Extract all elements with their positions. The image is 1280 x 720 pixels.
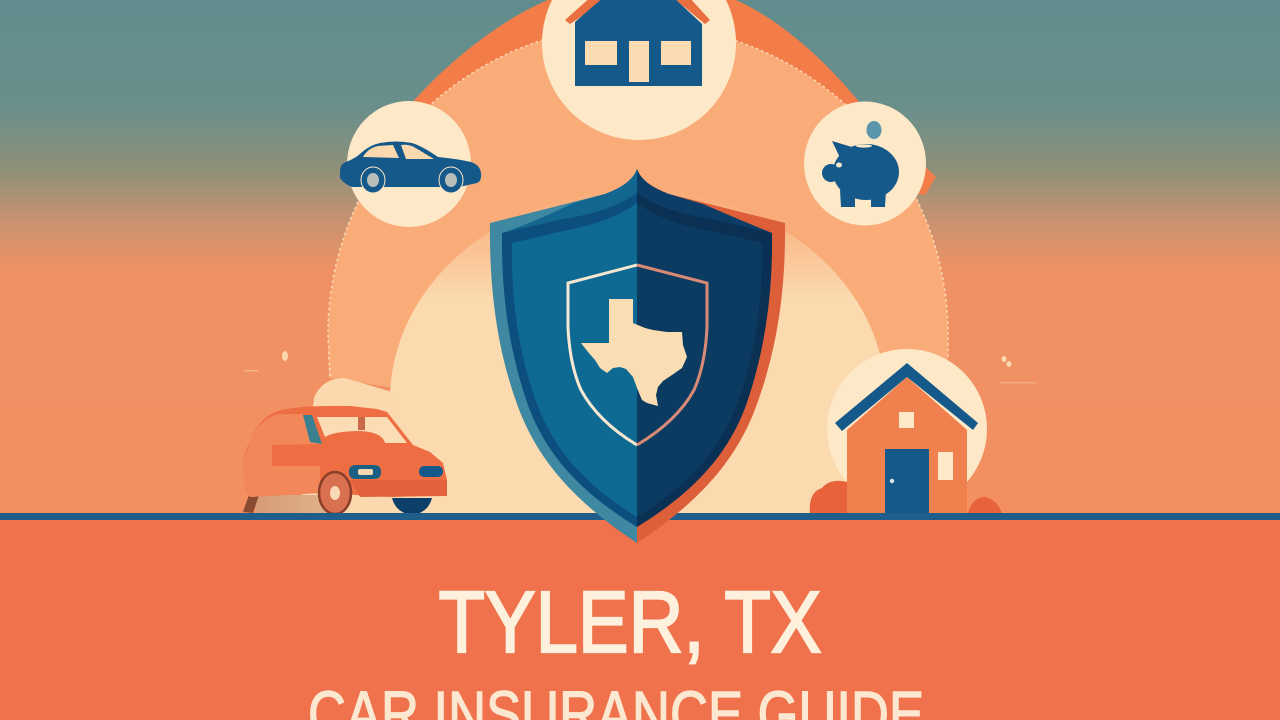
icon: house in cream circle, right <box>810 349 1002 515</box>
cream mound behind car <box>300 378 420 516</box>
ground line <box>0 513 1280 520</box>
icon: car in circle, left <box>340 101 481 227</box>
icon: house in circle, top <box>542 0 736 140</box>
small sparkle marks, right <box>1000 356 1036 384</box>
icon: piggy bank in circle, right <box>804 102 926 226</box>
icon: Texas silhouette <box>581 299 687 406</box>
dashed arc outline <box>328 25 948 376</box>
lower orange panel <box>0 520 1280 720</box>
inner cream dome <box>390 190 886 516</box>
inner shield outline, right <box>637 265 707 445</box>
background sky gradient <box>0 0 1280 516</box>
peach semicircle <box>328 25 948 420</box>
inner shield outline, left <box>568 265 637 445</box>
icon: red car <box>243 406 447 515</box>
outer orange arc <box>400 0 936 195</box>
small sparkle marks, left <box>244 351 288 372</box>
icon: shield with Texas <box>490 169 785 543</box>
title: TYLER, TX <box>438 574 822 671</box>
